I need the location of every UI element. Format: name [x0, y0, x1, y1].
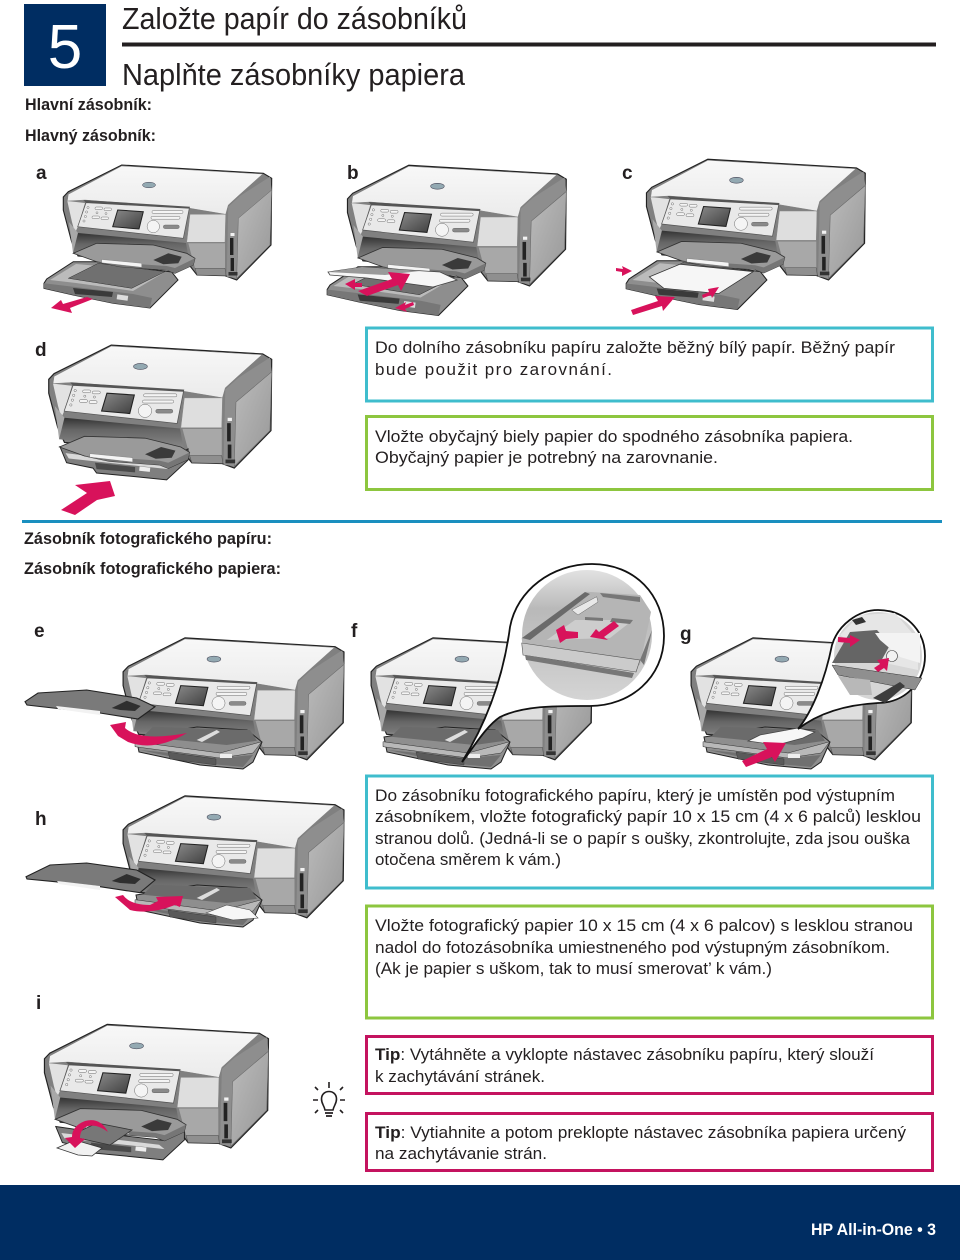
- tip box: Czech: Tip: Vytáhněte a vyklopte nástavec zásobníku papíru, který slouží: [375, 1045, 874, 1064]
- step b: b: [347, 163, 359, 184]
- header number box: 5: [48, 13, 82, 82]
- title: Slovak: Naplňte zásobníky papiera: [122, 57, 466, 92]
- instruction box: green 1: [366, 416, 932, 490]
- section divider: [22, 520, 942, 523]
- title rule: [122, 42, 936, 46]
- instruction box: teal 1: bude použit pro zarovnání.: [375, 360, 612, 379]
- heading: main tray: Hlavný zásobník:: [25, 126, 156, 145]
- instruction box: teal 2: Do zásobníku fotografického papíru, který je umístěn pod výstupním: [375, 786, 895, 805]
- step g: [680, 624, 912, 769]
- step g: g: [680, 624, 692, 645]
- icon: light bulb: [313, 1082, 345, 1116]
- step i: i: [36, 993, 41, 1014]
- heading: photo tray: Zásobník fotografického papiera:: [24, 559, 281, 578]
- step h: [26, 796, 344, 927]
- step h: h: [35, 809, 47, 830]
- step b: [327, 163, 566, 315]
- heading: main tray: [25, 95, 156, 145]
- heading: main tray: Hlavní zásobník:: [25, 95, 152, 114]
- instruction box: green 2: nadol do fotozásobníka umiestneného pod výstupným zásobníkom.: [375, 938, 890, 957]
- step d: [35, 340, 272, 515]
- heading: photo tray: Zásobník fotografického papíru:: [24, 529, 272, 548]
- tip box: Slovak: na zachytávanie strán.: [375, 1144, 547, 1163]
- title: Czech: Založte papír do zásobníků: [122, 1, 467, 36]
- step c: [616, 159, 865, 315]
- instruction box: green 1: Obyčajný papier je potrebný na zarovnanie.: [375, 448, 718, 467]
- instruction box: teal 2: zásobníkem, vložte fotografický papír 10 x 15 cm (4 x 6 palců) lesklou: [375, 807, 921, 826]
- instruction box: green 2: (Ak je papier s uškom, tak to musí smerovat’ k vám.): [375, 959, 772, 978]
- instruction box: green 2: Vložte fotografický papier 10 x 15 cm (4 x 6 palcov) s lesklou stranou: [375, 916, 913, 935]
- tip box: Czech: [366, 1036, 932, 1094]
- tip box: Slovak: Tip: Vytiahnite a potom preklopte nástavec zásobníka papiera určený: [375, 1123, 907, 1142]
- step c: c: [622, 163, 633, 184]
- step f: [351, 621, 592, 769]
- step f: f: [351, 621, 358, 642]
- footer bar: [0, 1185, 960, 1260]
- step e: e: [34, 621, 45, 642]
- step a: a: [36, 163, 47, 184]
- tip box: Czech: k zachytávání stránek.: [375, 1067, 545, 1086]
- instruction box: green 1: Vložte obyčajný biely papier do spodného zásobníka papiera.: [375, 427, 853, 446]
- zoom bubble f: [462, 564, 664, 762]
- instruction box: teal 1: Do dolního zásobníku papíru založte běžný bílý papír. Běžný papír: [375, 338, 895, 357]
- tip box: Slovak: [366, 1114, 932, 1170]
- step a: [36, 163, 272, 313]
- instruction box: teal 2: [366, 776, 932, 888]
- instruction box: teal 2: otočena směrem k vám.): [375, 850, 561, 869]
- footer bar: HP All-in-One • 3: [811, 1221, 936, 1239]
- instruction box: teal 2: stranou dolů. (Jedná-li se o papír s oušky, zkontrolujte, zda jsou ouška: [375, 829, 911, 848]
- header number box: [24, 4, 106, 86]
- instruction box: teal 1: [366, 328, 932, 401]
- step e: [25, 621, 344, 769]
- instruction box: green 2: [366, 906, 932, 1018]
- heading: photo tray: [24, 529, 281, 578]
- step i: [36, 993, 268, 1160]
- step d: d: [35, 340, 47, 361]
- zoom bubble g: [798, 610, 925, 729]
